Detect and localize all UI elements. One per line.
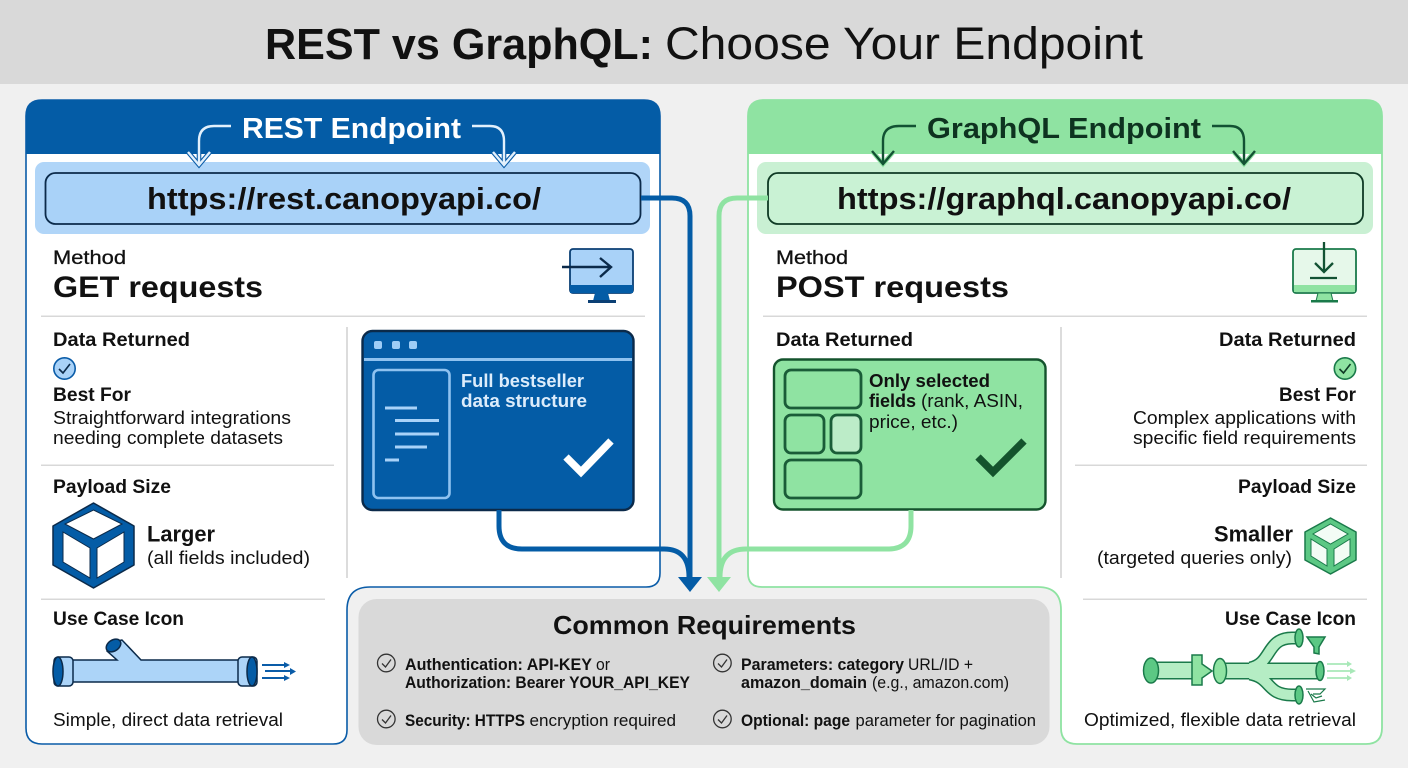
title banner [0,0,1408,84]
REST heading arrows [188,126,515,165]
requirement: parameters [714,654,1009,692]
data returned label right: Data Returned [1219,330,1356,351]
requirement: authentication [378,654,690,692]
arrow: GraphQL data card to requirements [720,510,911,577]
best for: Best For [53,385,132,406]
requirement: parameters: amazon_domain [741,674,867,692]
data card: selected fields [774,360,1046,510]
icon: check circle [1334,358,1356,379]
window dots [374,341,417,349]
card caption: data structure [461,391,587,411]
icon: branching pipe [1144,629,1356,704]
requirement: authentication: Authorization: Bearer YOUR_API_KEY [405,674,690,692]
payload size label: Payload Size [53,477,171,498]
icon: simple pipe [53,636,296,686]
title banner: Choose Your Endpoint [665,18,1144,69]
method value: GET requests [53,271,263,304]
requirement: parameters: URL/ID + [908,656,973,674]
card caption: (rank, ASIN, [921,391,1023,411]
method label: Method [776,248,848,269]
icon: white check [566,441,611,472]
GraphQL URL field: https://graphql.canopyapi.co/ [837,181,1291,216]
use case label: Use Case Icon [53,609,184,630]
best for: Straightforward integrations [53,408,291,428]
best for [53,385,291,448]
use case text: Simple, direct data retrieval [53,710,283,730]
arrow: GraphQL URL to requirements [707,198,768,592]
payload value: Smaller [1214,522,1293,546]
panel: common requirements [358,599,1050,745]
payload value [1097,522,1293,568]
REST URL field: https://rest.canopyapi.co/ [147,181,541,216]
card caption: Only selected [869,371,990,391]
GraphQL heading arrows [872,126,1255,164]
method label: Method [53,248,126,269]
GraphQL heading: GraphQL Endpoint [927,113,1201,145]
REST header bar [26,100,660,154]
card caption: Full bestseller [461,371,584,391]
payload value: (targeted queries only) [1097,548,1292,568]
best for: specific field requirements [1133,428,1356,448]
title banner: REST vs GraphQL: [265,20,653,69]
card caption: fields [869,391,916,411]
requirement: security: encryption required [530,712,676,730]
icon: small cube [1305,518,1356,574]
payload value [147,522,310,568]
payload size label: Payload Size [1238,477,1356,498]
best for: Best For [1279,385,1357,406]
requirement: optional: parameter for pagination [856,712,1036,730]
data returned label: Data Returned [53,330,190,351]
best for [1133,385,1357,448]
requirement: parameters: (e.g., amazon.com) [872,674,1009,692]
requirement: authentication: or [596,656,610,674]
REST heading: REST Endpoint [242,113,461,145]
document outline [374,370,450,498]
arrow: REST data card to requirements [499,510,689,577]
icon: large cube [53,503,134,588]
GraphQL URL strip [757,162,1373,234]
flow arrows [262,662,296,681]
requirements heading: Common Requirements [553,610,856,640]
GraphQL URL field [768,173,1363,224]
use case text: Optimized, flexible data retrieval [1084,710,1356,730]
payload value: (all fields included) [147,548,310,568]
icon: monitor with download [1293,242,1356,302]
use case label: Use Case Icon [1225,609,1356,630]
icon: dark check [978,441,1024,472]
GraphQL header bar [748,100,1382,154]
icon: check circle [54,358,75,379]
data returned label: Data Returned [776,330,913,351]
arrow: REST URL to requirements [641,198,702,592]
icon: monitor with arrow [562,249,633,303]
requirement: optional [714,710,1036,730]
card caption: price, etc.) [869,412,958,432]
card caption [869,371,1023,432]
requirement: security [378,710,676,730]
funnel [1307,637,1325,654]
method value: POST requests [776,271,1009,304]
REST URL field [46,173,640,224]
best for: Complex applications with [1133,408,1356,428]
REST URL strip [35,162,650,234]
requirement: parameters: Parameters: category [741,656,905,674]
filter glyph [1306,689,1325,702]
panel: GraphQL endpoint [748,100,1382,744]
flow arrows [1327,661,1356,681]
field blocks [785,370,861,498]
payload value: Larger [147,522,215,546]
data card: full structure [362,331,634,510]
requirement: security: Security: HTTPS [405,712,525,730]
requirement: optional: Optional: page [741,712,850,730]
card caption [461,371,587,411]
best for: needing complete datasets [53,428,283,448]
panel: REST endpoint [26,100,660,744]
requirement: authentication: Authentication: API-KEY [405,656,592,674]
